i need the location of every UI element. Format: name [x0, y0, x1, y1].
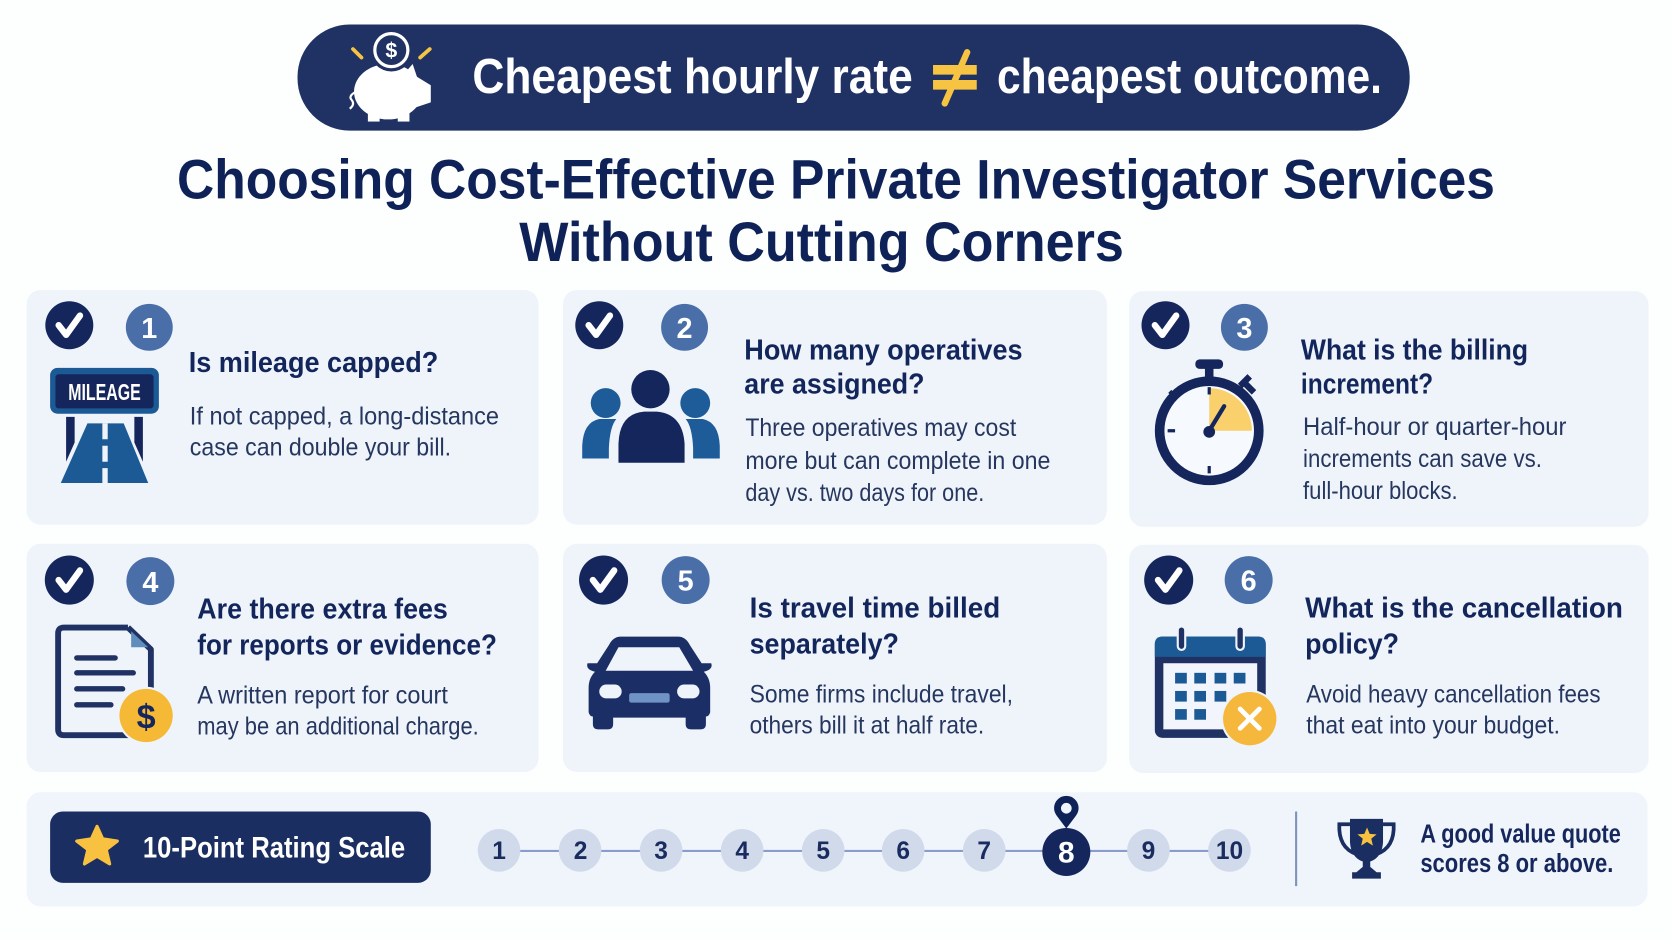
- rating scale 1 to 10: 1: [492, 838, 506, 865]
- body text: may be an additional charge.: [197, 713, 479, 741]
- panel: cancellation policy: [1129, 545, 1649, 773]
- rating scale 1 to 10: 6: [896, 838, 910, 865]
- rating scale 1 to 10: 7: [977, 838, 991, 865]
- rating scale 1 to 10: [478, 796, 1251, 876]
- number badge 3: [1221, 304, 1268, 351]
- number badge 2: [661, 304, 708, 351]
- heading: separately?: [750, 629, 899, 661]
- verdict text: A good value quote: [1420, 820, 1621, 848]
- highlighted score 8 with pin: [1042, 796, 1090, 876]
- rating label pill: 10-Point Rating Scale: [143, 831, 405, 864]
- body text: [745, 414, 1050, 507]
- banner text right: cheapest outcome.: [997, 50, 1382, 104]
- heading: policy?: [1305, 629, 1399, 661]
- panel background: [563, 544, 1107, 772]
- number badge 6: [1225, 556, 1273, 604]
- title: Choosing Cost-Effective Private Investigator Services: [177, 148, 1495, 210]
- icon: mileage road sign: [50, 368, 159, 483]
- body text: [750, 681, 1013, 740]
- body text: [1306, 681, 1601, 740]
- title: [177, 148, 1495, 273]
- banner pill: [298, 25, 1410, 131]
- highlighted score 8 with pin: 8: [1058, 837, 1075, 870]
- check badge: [1142, 301, 1189, 349]
- rating scale 1 to 10: 3: [654, 838, 668, 865]
- number badge 1: [126, 304, 173, 351]
- body text: increments can save vs.: [1303, 445, 1542, 473]
- body text: day vs. two days for one.: [745, 479, 984, 507]
- number badge 6: 6: [1241, 566, 1257, 598]
- heading: What is the cancellation: [1305, 592, 1623, 624]
- body text: [1303, 413, 1566, 505]
- rating scale 1 to 10: 5: [816, 838, 830, 865]
- panel background: [27, 290, 538, 525]
- check badge: [45, 556, 94, 605]
- heading: [744, 334, 1023, 400]
- check badge: [579, 556, 628, 605]
- icon: calendar with cancel mark: [1155, 630, 1279, 747]
- body text: Three operatives may cost: [745, 414, 1016, 442]
- body text: [190, 402, 499, 461]
- icon: three operatives: [582, 370, 720, 463]
- heading: Is mileage capped?: [189, 347, 438, 379]
- heading: [197, 593, 497, 662]
- number badge 4: 4: [142, 567, 158, 599]
- heading: increment?: [1301, 368, 1433, 400]
- panel: billing increment: [1129, 291, 1649, 527]
- verdict text: scores 8 or above.: [1420, 850, 1613, 878]
- number badge 1: 1: [141, 313, 157, 345]
- icon: not equal sign: [933, 52, 977, 103]
- panel: how many operatives: [563, 290, 1107, 525]
- body text: others bill it at half rate.: [750, 712, 984, 740]
- number badge 5: 5: [678, 566, 694, 598]
- number badge 2: 2: [677, 313, 693, 345]
- icon: trophy with star: [1339, 819, 1394, 879]
- body text: Avoid heavy cancellation fees: [1306, 681, 1601, 709]
- panel: 10-point rating scale: [27, 792, 1647, 906]
- rating scale 1 to 10: 4: [735, 838, 749, 865]
- icon: stopwatch: [1160, 359, 1259, 480]
- heading: [1301, 334, 1528, 400]
- rating scale 1 to 10: 10: [1216, 838, 1243, 865]
- body text: A written report for court: [197, 682, 448, 710]
- panel: extra fees: [27, 544, 538, 772]
- number badge 5: [662, 556, 710, 604]
- verdict text: [1420, 820, 1621, 878]
- body text: [197, 682, 479, 741]
- icon: mileage road sign: MILEAGE: [68, 379, 141, 405]
- body text: full-hour blocks.: [1303, 477, 1458, 505]
- heading: Are there extra fees: [197, 593, 448, 625]
- panel background: [27, 544, 538, 772]
- heading: Is travel time billed: [750, 592, 1000, 624]
- heading: [1305, 592, 1623, 661]
- panel: is mileage capped: [27, 290, 538, 525]
- rating scale 1 to 10: 9: [1142, 838, 1155, 865]
- number badge 3: 3: [1236, 313, 1252, 345]
- heading: for reports or evidence?: [197, 630, 497, 662]
- heading: What is the billing: [1301, 334, 1528, 366]
- icon: document with dollar coin: $: [137, 698, 156, 736]
- banner: cheapest rate is not cheapest outcome: [298, 25, 1410, 131]
- icon: piggy bank with coin: $: [385, 39, 397, 63]
- body text: Some firms include travel,: [750, 681, 1013, 709]
- rating panel background: [27, 792, 1647, 906]
- body text: that eat into your budget.: [1306, 712, 1560, 740]
- divider: [1295, 811, 1297, 886]
- icon: document with dollar coin: [58, 628, 175, 744]
- panel background: [1129, 291, 1649, 527]
- body text: If not capped, a long-distance: [190, 402, 499, 430]
- heading: are assigned?: [744, 368, 925, 400]
- body text: more but can complete in one: [745, 447, 1050, 475]
- body text: case can double your bill.: [190, 433, 451, 461]
- banner text left: Cheapest hourly rate: [472, 50, 913, 104]
- panel background: [1129, 545, 1649, 773]
- heading: [750, 592, 1000, 661]
- title: Without Cutting Corners: [519, 211, 1124, 273]
- check badge: [575, 301, 623, 349]
- icon: piggy bank with coin: [350, 29, 431, 122]
- number badge 4: [126, 557, 174, 605]
- check badge: [45, 301, 93, 349]
- panel: travel time: [563, 544, 1107, 772]
- rating scale 1 to 10: 2: [574, 838, 587, 865]
- check badge: [1144, 556, 1193, 605]
- icon: car: [587, 637, 712, 729]
- rating label pill: [50, 811, 431, 883]
- body text: Half-hour or quarter-hour: [1303, 413, 1566, 441]
- heading: How many operatives: [744, 334, 1023, 366]
- panel background: [563, 290, 1107, 525]
